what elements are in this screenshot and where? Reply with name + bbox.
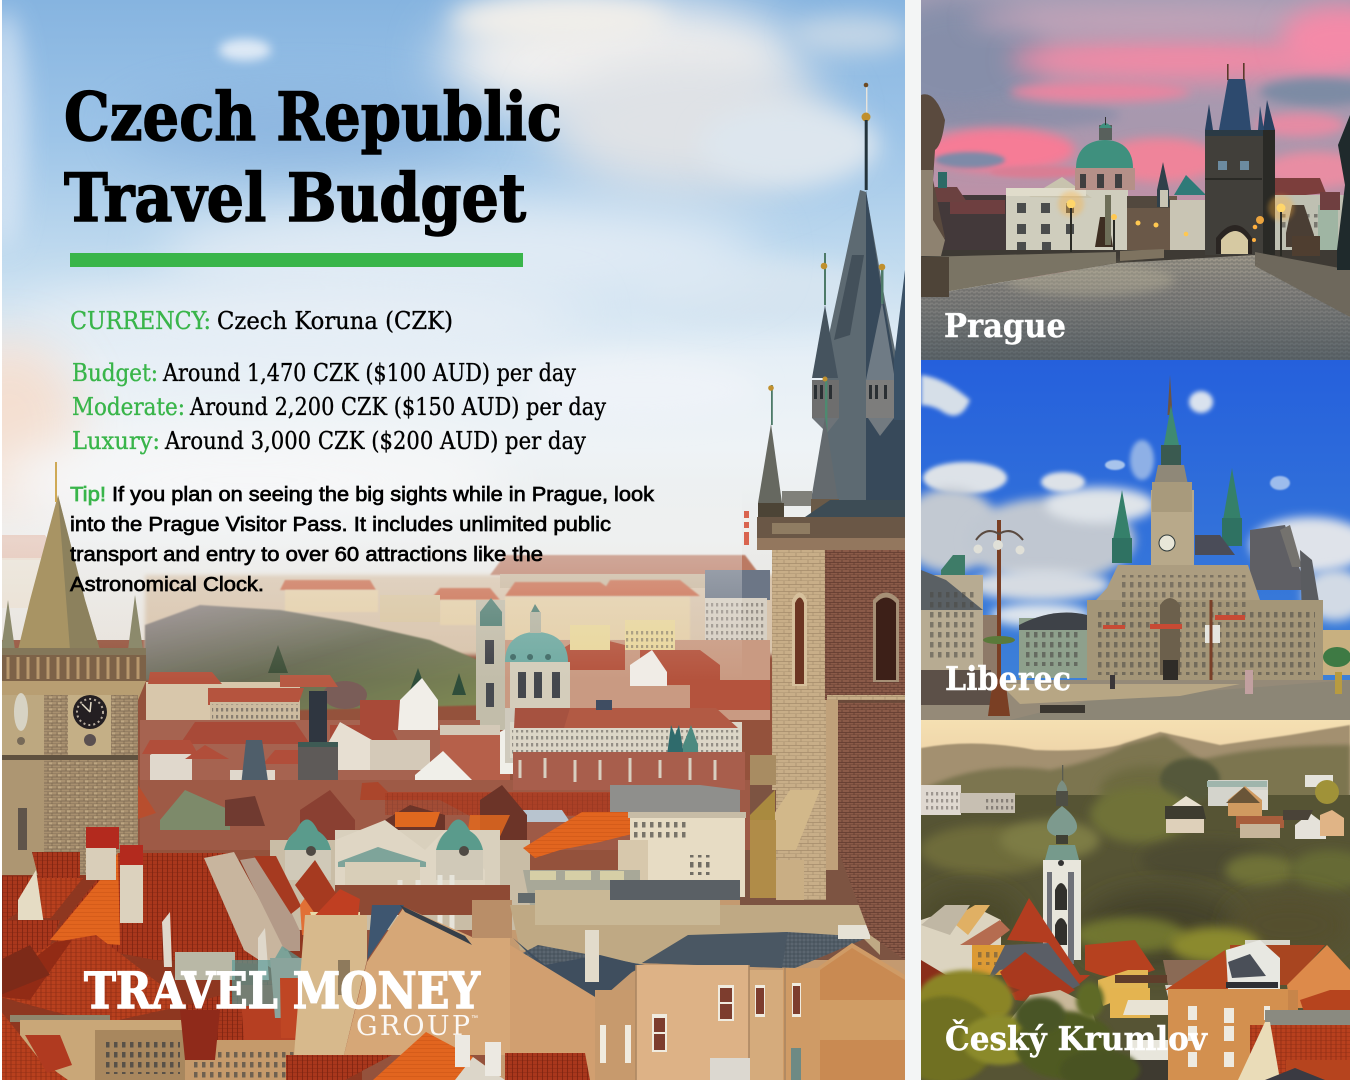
city base tones	[2, 640, 905, 1080]
logo: Travel Money Group: GROUP	[356, 1011, 470, 1042]
green title underline	[70, 253, 523, 267]
mid city buildings	[140, 672, 515, 780]
town hall	[1087, 375, 1350, 700]
hill trees	[268, 645, 466, 709]
white haze over the upper city	[2, 535, 742, 664]
sunset sky	[921, 0, 1350, 280]
left clock tower	[1, 462, 146, 875]
forest slope	[920, 758, 1350, 1080]
title: Travel Budget	[64, 159, 526, 237]
panel: Prague cityscape photo	[0, 0, 910, 1080]
text block: currency: Czech Koruna (CZK)	[217, 307, 453, 335]
glowing street lamps	[1058, 191, 1294, 256]
rooftops left	[921, 898, 1265, 1040]
text block: currency	[70, 307, 453, 335]
right-hand hazy city	[480, 620, 770, 720]
wooded hill	[145, 605, 490, 710]
text block: tip: Astronomical Clock.	[70, 573, 264, 596]
text block: daily budgets: Around 3,000 CZK ($200 AUD) per day	[164, 427, 586, 455]
text block: daily budgets: Around 2,200 CZK ($150 AUD) per day	[189, 393, 606, 421]
right gothic tower	[750, 83, 905, 960]
label: Prague: Prague	[944, 306, 1066, 345]
label: Český Krumlov: Český Krumlov	[945, 1018, 1208, 1058]
text block: tip	[70, 483, 655, 596]
panel: Liberec photo	[900, 360, 1350, 720]
distant city	[0, 511, 785, 658]
bridge walls and statues	[921, 94, 1350, 317]
text block: currency: CURRENCY:	[70, 307, 211, 335]
text block: tip: into the Prague Visitor Pass. It includes unlimited public	[70, 513, 611, 536]
bridge road	[921, 255, 1350, 360]
side buildings	[921, 555, 1087, 680]
text block: daily budgets: Around 1,470 CZK ($100 AUD) per day	[162, 359, 576, 387]
church tower	[1043, 765, 1081, 964]
title	[64, 78, 562, 237]
red rooftops band	[138, 752, 750, 930]
text block: daily budgets: Moderate:	[72, 393, 185, 421]
logo: Travel Money Group: ™	[471, 1015, 478, 1022]
blue sky and clouds	[900, 360, 1350, 680]
foreground tan walls with windows	[510, 943, 905, 1080]
text block: daily budgets	[72, 359, 606, 455]
teal dome turrets and ornate buildings	[284, 820, 510, 930]
foreground orange bottom roofs	[286, 1032, 590, 1080]
panel: Český Krumlov photo	[895, 720, 1350, 1080]
foreground lower left roofs	[2, 935, 302, 1080]
hillside houses	[921, 775, 1344, 839]
foreground tan gable building	[294, 900, 512, 1055]
label: Liberec: Liberec	[945, 659, 1071, 698]
panel: Prague photo	[921, 0, 1350, 360]
slate roofs and rear walls	[510, 880, 880, 1000]
text block: daily budgets: Budget:	[72, 359, 158, 387]
cream modern buildings	[518, 812, 746, 905]
sky with clouds	[0, 0, 910, 640]
foreground yellow trees	[895, 970, 1140, 1080]
baroque dome church	[476, 598, 570, 730]
text block: tip: Tip!	[70, 483, 106, 506]
golden sky and hills	[921, 720, 1350, 880]
logo: Travel Money Group: TRAVEL MONEY	[84, 961, 481, 1020]
text block: tip: If you plan on seeing the big sights while in Prague, look	[112, 483, 655, 506]
logo: Travel Money Group	[84, 961, 481, 1042]
left white edge	[0, 0, 2, 1080]
square pavement	[921, 670, 1350, 720]
bridge tower	[1205, 63, 1275, 255]
orange rooftops	[395, 812, 640, 858]
dome and buildings	[921, 117, 1350, 270]
title: Czech Republic	[64, 78, 562, 156]
rooftops right	[1120, 940, 1350, 1080]
dark bridge tower	[242, 691, 338, 780]
long palace roof	[510, 700, 742, 760]
foreground left roofs	[0, 827, 360, 985]
ornate lamp post	[974, 520, 1024, 716]
text block: daily budgets: Luxury:	[72, 427, 160, 455]
text block: tip: transport and entry to over 60 attractions like the	[70, 543, 543, 566]
